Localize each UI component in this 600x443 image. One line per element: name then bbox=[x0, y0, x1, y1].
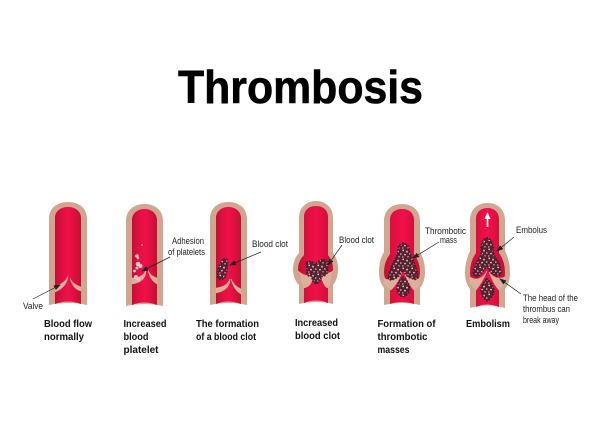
clot bbox=[218, 259, 228, 280]
caption: blood flow normally: Blood flow bbox=[44, 318, 93, 330]
caption: increased blood clot: blood clot bbox=[295, 330, 340, 342]
small callouts: break away bbox=[523, 315, 559, 325]
caption: increased blood platelet: platelet bbox=[124, 344, 159, 356]
small callouts: The head of the bbox=[523, 293, 578, 303]
caption: increased blood clot bbox=[295, 317, 340, 342]
vessel 3: formation of clot bbox=[210, 202, 247, 305]
caption: formation of a blood clot: The formation bbox=[196, 318, 259, 330]
vessel 5: thrombotic masses bbox=[379, 204, 425, 305]
caption: blood flow normally: normally bbox=[44, 331, 84, 343]
small callouts: of platelets bbox=[168, 247, 205, 257]
small callouts bbox=[23, 225, 578, 325]
clot bbox=[306, 260, 328, 284]
caption: formation of thrombotic masses bbox=[378, 318, 436, 356]
caption: formation of a blood clot bbox=[196, 318, 259, 343]
caption: embolism: Embolism bbox=[466, 318, 510, 330]
title: Thrombosis bbox=[178, 61, 423, 113]
caption: blood flow normally bbox=[44, 318, 93, 343]
thrombotic mass bbox=[388, 243, 418, 280]
caption: formation of thrombotic masses: thrombotic bbox=[378, 331, 428, 343]
caption: increased blood platelet bbox=[124, 318, 166, 356]
caption: increased blood clot: Increased bbox=[295, 317, 338, 329]
flow arrow bbox=[484, 212, 490, 227]
small callouts: Blood clot bbox=[339, 235, 374, 245]
caption: increased blood platelet: blood bbox=[124, 331, 148, 343]
small callouts: thrombus can bbox=[523, 304, 570, 314]
caption: increased blood platelet: Increased bbox=[124, 318, 166, 330]
small callouts: Blood clot bbox=[252, 239, 288, 249]
small callouts: Adhesion bbox=[172, 236, 204, 246]
caption: formation of a blood clot: of a blood clot bbox=[196, 331, 256, 343]
label arrows bbox=[33, 237, 521, 299]
caption: formation of thrombotic masses: masses bbox=[378, 344, 410, 356]
caption: formation of thrombotic masses: Formation of bbox=[378, 318, 436, 330]
small callouts: mass bbox=[440, 235, 457, 245]
small callouts: Thrombotic bbox=[425, 226, 466, 236]
thrombus base bbox=[481, 279, 494, 301]
vessel 6: embolism bbox=[465, 203, 510, 308]
vessel 2: increased platelets bbox=[126, 204, 163, 306]
embolus bbox=[473, 238, 501, 277]
small callouts: Valve bbox=[23, 301, 43, 311]
vessel 4: increased clot bbox=[293, 201, 338, 304]
small callouts: Embolus bbox=[516, 225, 547, 235]
vessel 1: normal blood flow bbox=[49, 202, 87, 305]
platelets bbox=[133, 244, 143, 281]
